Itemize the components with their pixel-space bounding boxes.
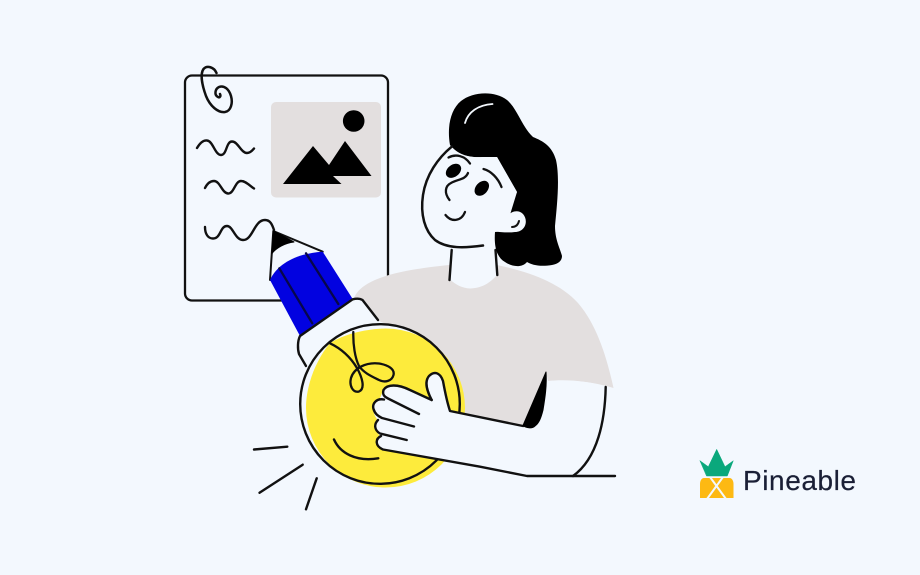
bulb smile (334, 440, 378, 459)
eye left (443, 161, 464, 181)
icon: paper clip spiral (202, 67, 232, 112)
pencil (270, 231, 353, 336)
arm outer line (573, 387, 606, 476)
nose (446, 173, 468, 200)
bulb yellow fill (306, 328, 465, 488)
bulb glass outline (300, 324, 460, 484)
eye right (472, 178, 492, 199)
icon: sun (343, 110, 365, 132)
bulb glass fill (300, 324, 460, 484)
neck (450, 235, 497, 288)
face (422, 147, 526, 247)
eyebrow left (448, 156, 470, 164)
image placeholder (271, 102, 381, 198)
pencil wood (270, 231, 323, 280)
hand outline (426, 373, 523, 426)
eyebrow right (484, 169, 502, 187)
lightbulb (298, 299, 465, 488)
icon: mountains (283, 141, 372, 184)
hair highlight (465, 104, 492, 123)
bulb socket (298, 299, 400, 380)
squiggle line 2 (205, 181, 254, 194)
pencil tip (272, 231, 294, 254)
light rays (254, 447, 317, 509)
shirt (350, 265, 614, 426)
logo wordmark: Pineable (743, 465, 856, 496)
logo: Pineable (700, 449, 856, 499)
sleeve shadow (523, 372, 546, 428)
smile (446, 212, 465, 220)
icon: pineapple (700, 449, 734, 499)
filament (330, 332, 394, 392)
squiggle line 1 (197, 140, 254, 155)
squiggle line 3 (205, 220, 274, 240)
ear (495, 211, 526, 232)
pencil body (270, 252, 353, 336)
hair (449, 93, 562, 266)
panel: paper sheet (185, 67, 388, 300)
arm and hand (373, 372, 615, 476)
